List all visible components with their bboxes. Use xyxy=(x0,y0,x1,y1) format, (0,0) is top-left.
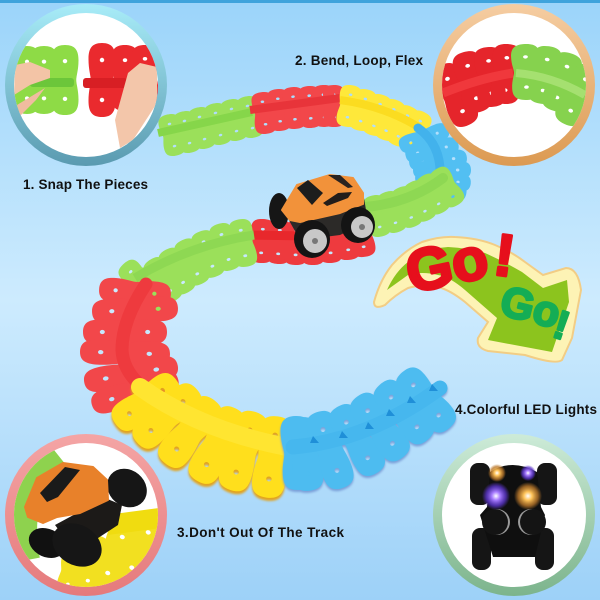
rear left wheel xyxy=(269,193,289,229)
go text green: Go xyxy=(496,277,565,338)
caption 4: 4.Colorful LED Lights xyxy=(455,402,597,417)
photo: hands snapping pieces xyxy=(14,43,158,148)
track piece: red left xyxy=(80,277,182,417)
inner disc xyxy=(14,443,158,587)
track piece: yellow lower xyxy=(107,368,294,500)
rear right wheel xyxy=(341,207,375,243)
track: flexible loop xyxy=(80,84,472,500)
side window xyxy=(323,192,352,206)
go go arrow badge xyxy=(374,222,581,362)
ring xyxy=(5,434,167,596)
photo: bent pieces xyxy=(442,44,586,127)
track piece: green bend xyxy=(361,163,467,239)
arrow outline xyxy=(374,237,581,362)
car body xyxy=(282,175,363,222)
panel: colorful led lights xyxy=(433,434,595,596)
car on track xyxy=(269,175,375,258)
track piece: green top xyxy=(157,94,265,158)
photo: black car with LEDs xyxy=(470,463,557,570)
track piece: red top xyxy=(250,84,345,135)
ring xyxy=(433,4,595,166)
caption 3: 3.Don't Out Of The Track xyxy=(177,525,344,540)
inner disc xyxy=(442,13,586,157)
top bar xyxy=(0,0,600,3)
front wheel xyxy=(294,220,330,258)
ring xyxy=(433,434,595,596)
go text red: ! xyxy=(490,222,519,290)
panel: don't out of the track xyxy=(5,434,169,597)
go text green: ! xyxy=(548,303,574,349)
rear window xyxy=(328,175,353,188)
go text red: Go xyxy=(400,224,494,306)
arrow green fill xyxy=(387,247,569,352)
inner disc xyxy=(442,443,586,587)
photo: car tilted on track xyxy=(24,455,169,597)
ring xyxy=(5,4,167,166)
caption 1: 1. Snap The Pieces xyxy=(23,177,148,192)
caption 2: 2. Bend, Loop, Flex xyxy=(295,53,423,68)
track piece: green middle xyxy=(115,217,259,316)
track piece: blue lower xyxy=(280,362,461,493)
panel: snap the pieces xyxy=(5,4,167,166)
track piece: blue bend xyxy=(396,121,472,203)
track piece: yellow top xyxy=(335,84,434,155)
car chassis xyxy=(286,198,368,240)
windshield xyxy=(297,180,323,205)
track piece: red under car xyxy=(249,212,377,265)
panel: bend loop flex xyxy=(428,4,600,166)
inner disc xyxy=(14,13,158,157)
